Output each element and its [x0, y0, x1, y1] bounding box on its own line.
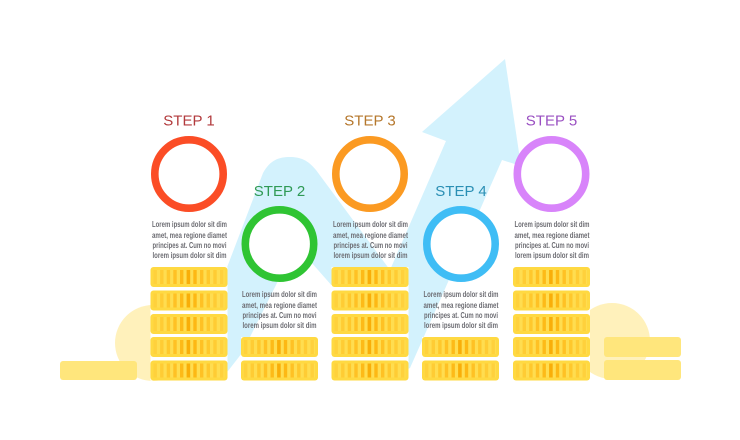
step 1 text: lorem ipsum dolor sit dim	[152, 250, 227, 260]
step 1	[150, 112, 228, 380]
step 4 text: amet, mea regione diamet	[424, 300, 499, 310]
step 5 coin stack	[513, 267, 590, 380]
step 3 text: amet, mea regione diamet	[333, 230, 408, 240]
step 4 coin stack	[422, 337, 499, 380]
step 4 ring	[427, 210, 495, 278]
pale sun circle right	[574, 303, 650, 379]
step 3	[332, 112, 408, 380]
step 3 heading: STEP 3	[344, 112, 396, 130]
step 4 heading: STEP 4	[435, 183, 487, 200]
step 5 text: Lorem ipsum dolor sit dim	[514, 219, 590, 229]
step 2 heading: STEP 2	[254, 183, 305, 200]
step 4 text: lorem ipsum dolor sit dim	[424, 320, 498, 330]
step 2 text: lorem ipsum dolor sit dim	[242, 320, 317, 330]
step 2 ring	[245, 210, 314, 278]
step 5 heading: STEP 5	[526, 112, 577, 130]
step 3 text	[333, 219, 408, 260]
step 2 coin stack	[241, 337, 318, 380]
step 5 text: amet, mea regione diamet	[514, 230, 590, 240]
step 4 text: Lorem ipsum dolor sit dim	[424, 289, 499, 299]
step 3 coin stack	[332, 267, 408, 380]
step 1 ring	[155, 140, 223, 208]
step 3 ring	[336, 140, 404, 208]
step 1 heading: STEP 1	[163, 112, 215, 130]
growth arrow	[226, 59, 521, 372]
step 2 text: amet, mea regione diamet	[242, 300, 317, 310]
step 5 text: lorem ipsum dolor sit dim	[515, 250, 589, 260]
step 4	[422, 183, 499, 380]
step 3 text: principes at. Cum no movi	[334, 240, 408, 250]
faded coin left	[60, 361, 137, 380]
faded coins right	[604, 337, 681, 380]
step 1 coin stack	[150, 267, 228, 380]
step 5	[513, 112, 590, 380]
step 5 text: principes at. Cum no movi	[515, 240, 589, 250]
step 2 text	[242, 289, 317, 330]
step 3 text: lorem ipsum dolor sit dim	[334, 250, 408, 260]
step 2 text: Lorem ipsum dolor sit dim	[242, 289, 317, 299]
step 4 text	[424, 289, 499, 330]
step 4 text: principes at. Cum no movi	[424, 310, 498, 320]
step 1 text: principes at. Cum no movi	[152, 240, 226, 250]
step 2 text: principes at. Cum no movi	[242, 310, 316, 320]
step 5 ring	[517, 140, 586, 208]
step 5 text	[514, 219, 590, 260]
step 2	[241, 183, 318, 380]
step 1 text: Lorem ipsum dolor sit dim	[152, 219, 227, 229]
step 3 text: Lorem ipsum dolor sit dim	[333, 219, 408, 229]
step 1 text	[152, 219, 227, 260]
step 1 text: amet, mea regione diamet	[152, 230, 227, 240]
pale sun circle left	[115, 305, 191, 381]
